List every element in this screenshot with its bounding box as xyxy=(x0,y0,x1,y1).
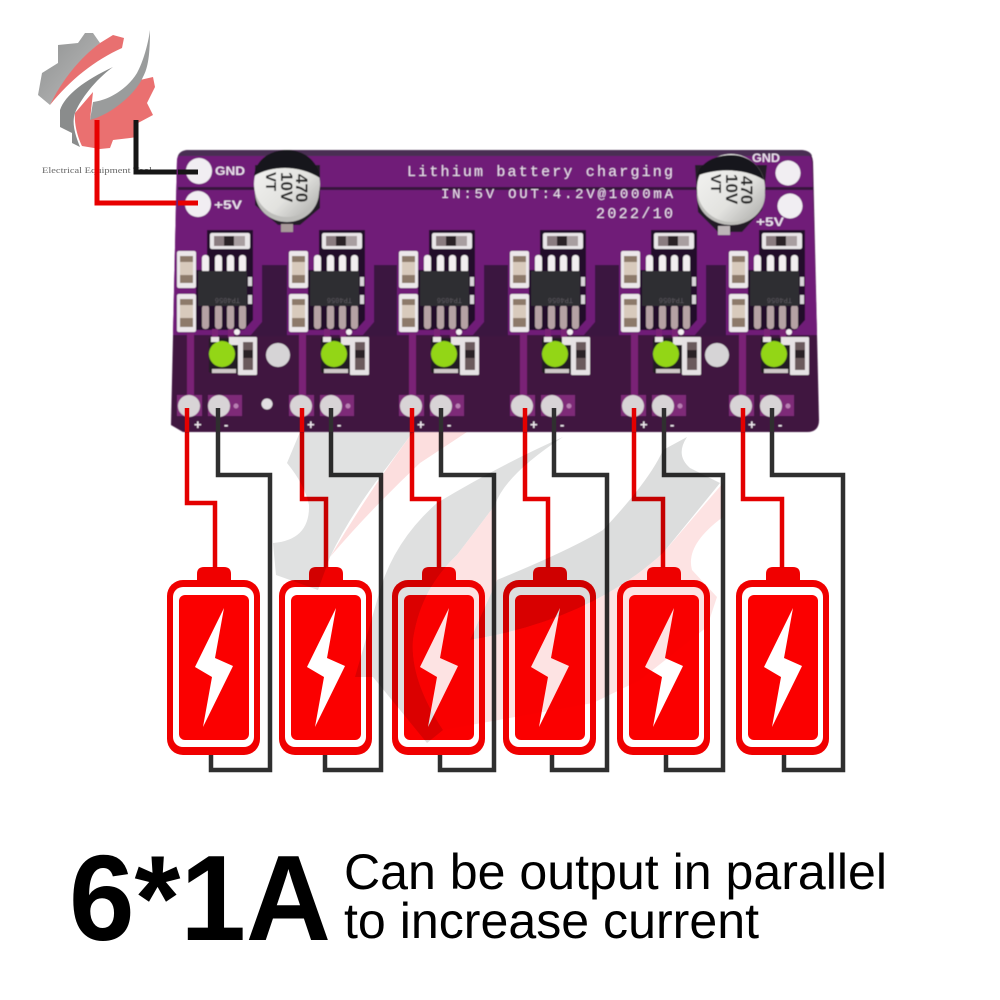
pad labels: +5V xyxy=(214,198,242,212)
output polarity labels xyxy=(194,417,782,432)
chip markings: TP4056 xyxy=(767,295,792,303)
ground pours xyxy=(250,265,726,336)
board title text: Lithium battery charging xyxy=(407,164,673,181)
output polarity labels: - xyxy=(447,417,451,432)
output polarity labels: - xyxy=(778,417,782,432)
capacitor left: VT xyxy=(262,172,279,191)
capacitor right: 470 xyxy=(737,176,756,204)
headline: 6*1A: 6*1A xyxy=(69,830,331,966)
capacitor left: 470 xyxy=(292,174,311,202)
capacitor right xyxy=(695,154,767,235)
chip markings: TP4056 xyxy=(437,295,462,303)
output polarity labels: - xyxy=(670,417,674,432)
mounting holes xyxy=(262,343,729,410)
input wire ends on pads xyxy=(178,172,198,203)
description text xyxy=(344,844,887,949)
output polarity labels: + xyxy=(307,417,315,432)
channel circuits xyxy=(177,230,809,417)
capacitor right: 10V xyxy=(722,174,741,205)
board title text: IN:5V OUT:4.2V@1000mA xyxy=(441,187,674,203)
chip markings: TP4056 xyxy=(659,295,684,303)
output polarity labels: + xyxy=(417,417,425,432)
capacitor left xyxy=(254,150,320,232)
circuit board xyxy=(171,150,819,432)
power pads xyxy=(185,158,802,218)
chip markings: TP4056 xyxy=(215,295,240,303)
board title text: 2022/10 xyxy=(596,206,673,223)
input wires xyxy=(97,120,198,203)
top edge xyxy=(178,150,812,156)
description text: Can be output in parallel xyxy=(344,844,887,900)
watermark logo xyxy=(273,432,723,743)
capacitor right: VT xyxy=(707,174,724,193)
trace line xyxy=(178,187,813,190)
chip markings: TP4056 xyxy=(327,295,352,303)
output polarity labels: - xyxy=(337,417,341,432)
description text: to increase current xyxy=(344,893,759,949)
pad wire ends xyxy=(187,408,772,432)
board title text xyxy=(407,164,674,223)
upper copper area xyxy=(173,152,817,335)
pad labels xyxy=(214,151,784,229)
output polarity labels: + xyxy=(530,417,538,432)
board substrate xyxy=(171,150,819,432)
chip markings xyxy=(215,295,792,303)
pad labels: GND xyxy=(215,164,245,178)
output polarity labels: + xyxy=(748,417,756,432)
logo caption: Electrical Equipment Tool xyxy=(42,165,153,175)
pad labels: GND xyxy=(752,151,780,165)
batteries xyxy=(167,567,829,755)
output wires xyxy=(187,410,843,770)
output polarity labels: - xyxy=(560,417,564,432)
capacitor left: 10V xyxy=(277,172,296,203)
output polarity labels: + xyxy=(640,417,648,432)
output polarity labels: + xyxy=(194,417,202,432)
pad labels: +5V xyxy=(756,215,784,229)
logo: gear and lightning mark xyxy=(38,30,155,149)
output polarity labels: - xyxy=(224,417,228,432)
chip markings: TP4056 xyxy=(548,295,573,303)
